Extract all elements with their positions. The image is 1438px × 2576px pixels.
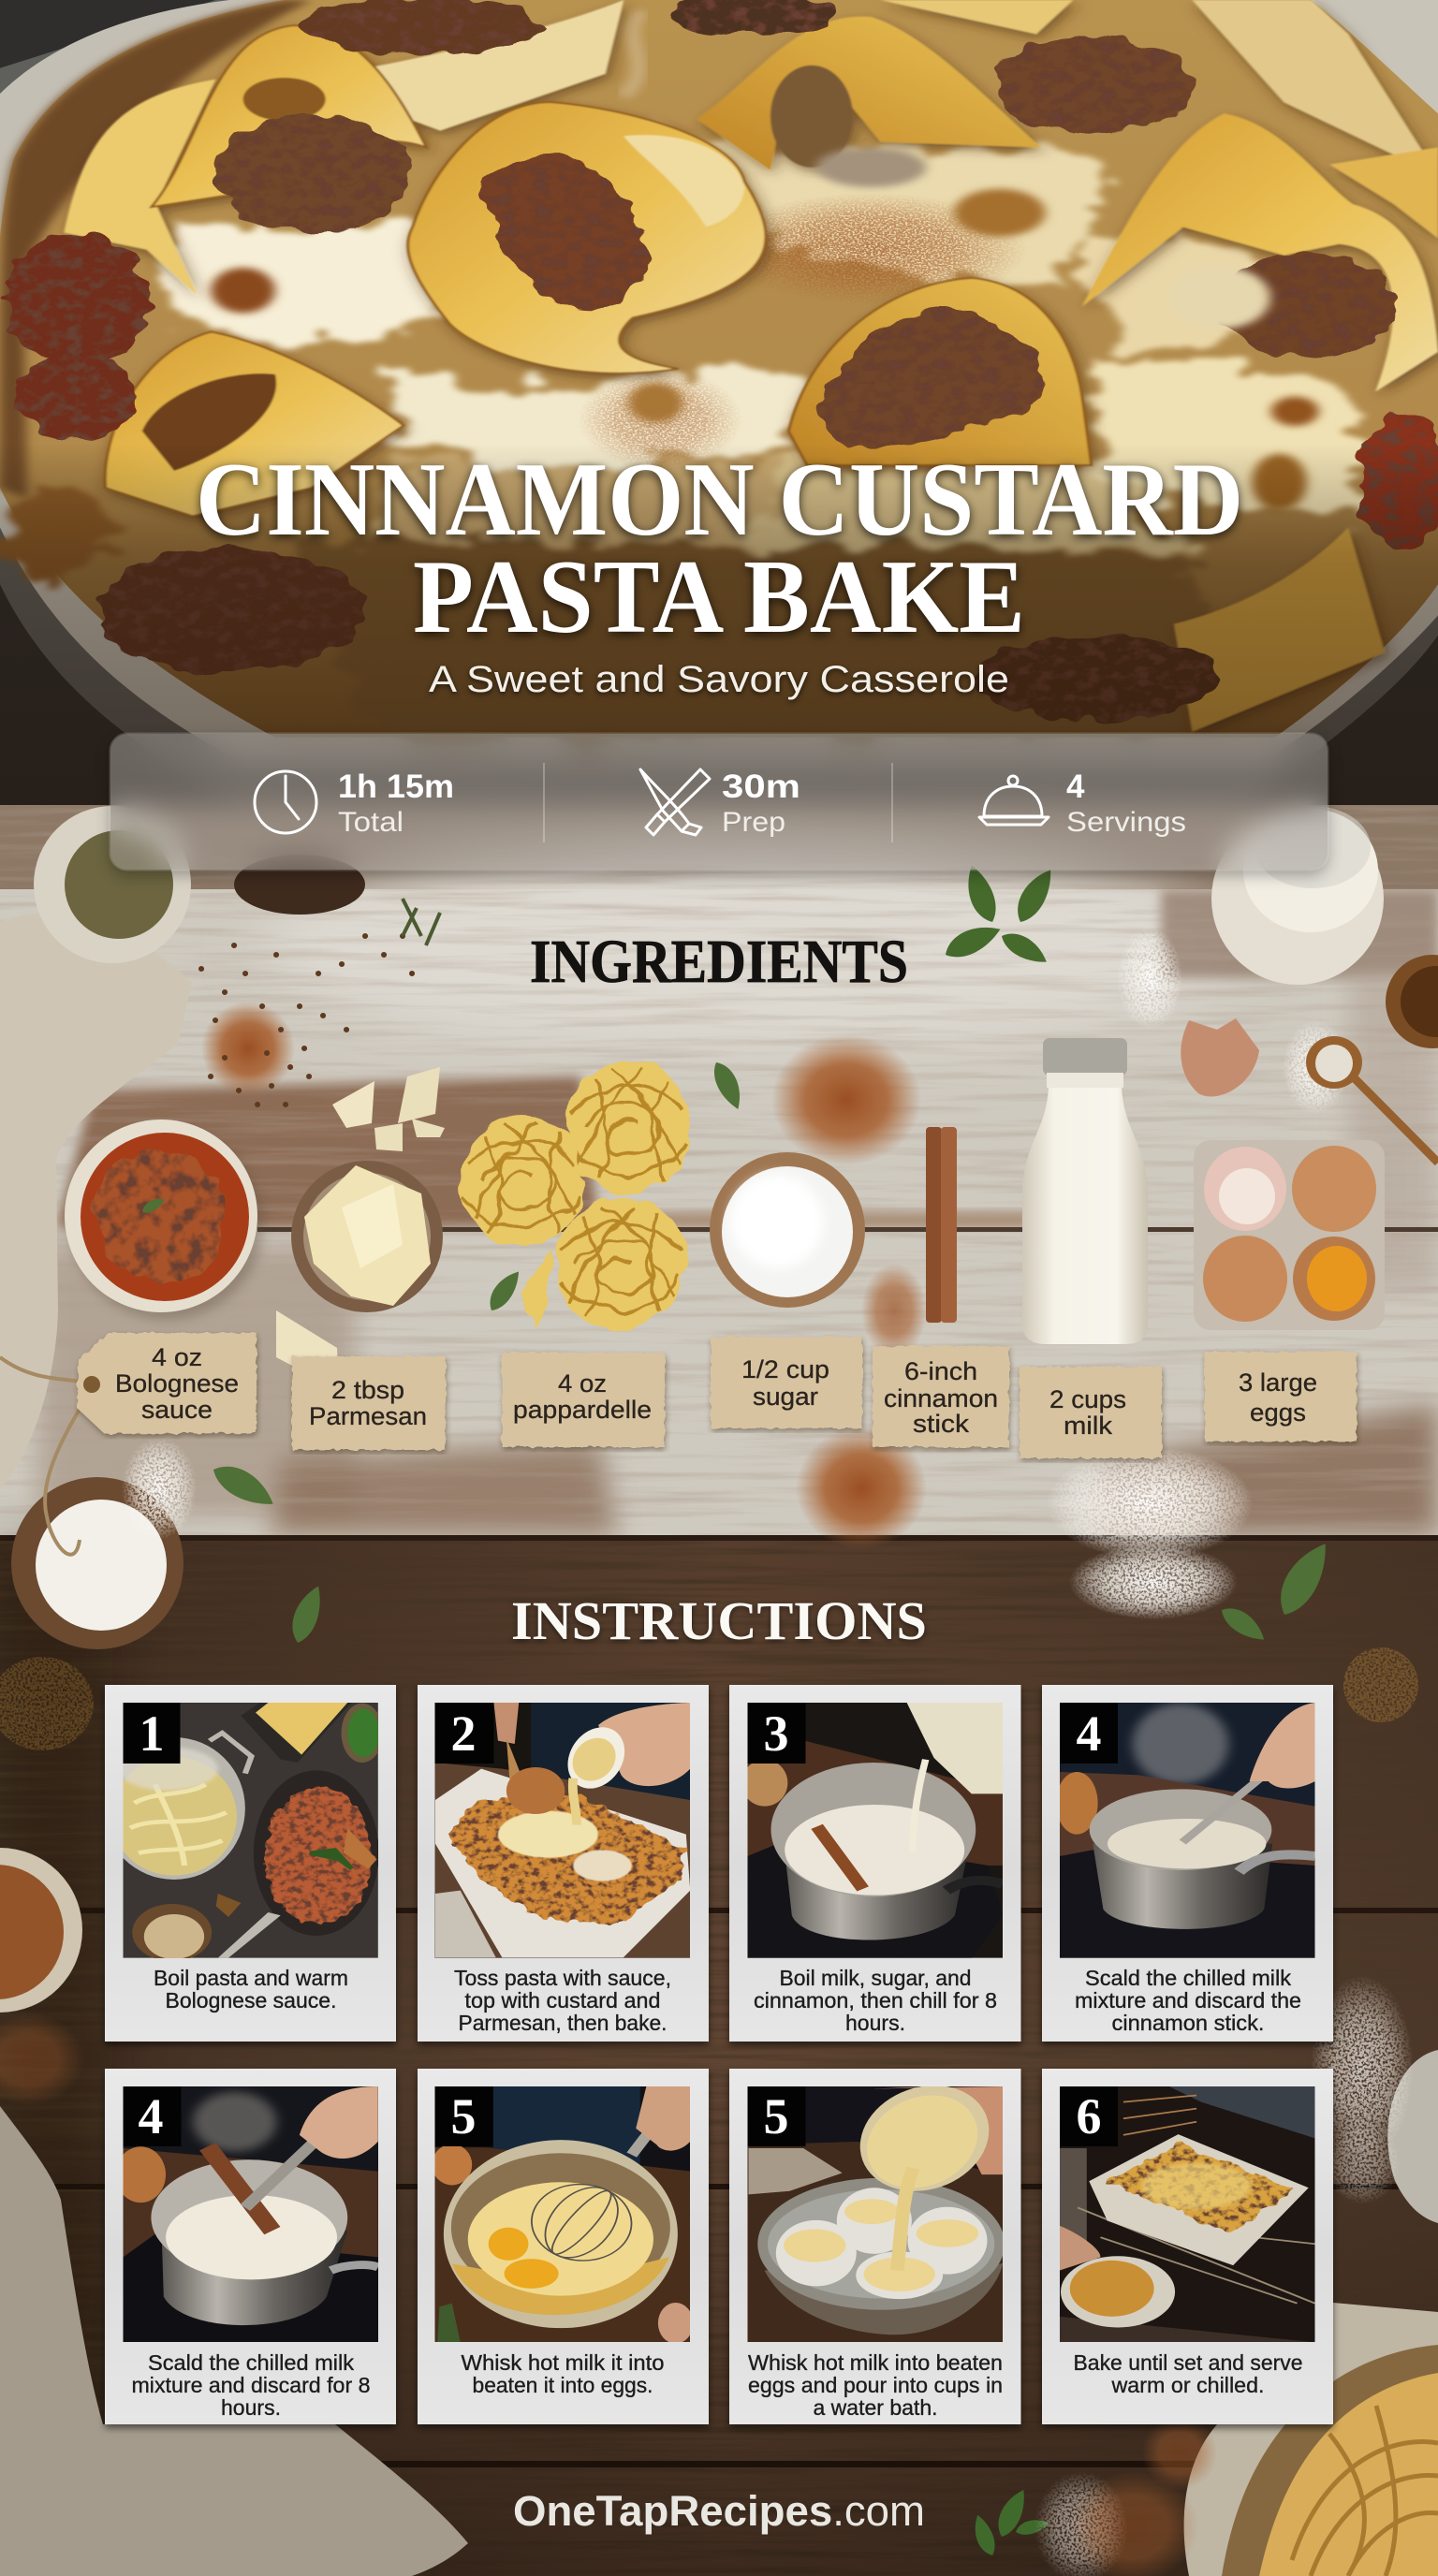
label: Parmesan — [292, 1356, 446, 1450]
label: sugar — [711, 1337, 862, 1428]
ingredient: egg carton — [1194, 1140, 1385, 1330]
label: milk — [1020, 1367, 1162, 1458]
caption: cinnamon stick. — [1112, 2011, 1264, 2035]
stat: servings — [1066, 768, 1186, 838]
icon: dark jar lid — [234, 855, 365, 915]
stat: total time: 1h 15m — [338, 768, 454, 805]
cinnamon and flour dustings — [122, 899, 1348, 1619]
step number: 4 — [1077, 1705, 1101, 1762]
label: Bolognese tag: Bolognese — [115, 1369, 239, 1398]
hero photo: baked pasta casserole — [0, 0, 1438, 817]
stat: total time — [338, 768, 454, 838]
caption: eggs and pour into cups in — [748, 2373, 1003, 2397]
caption — [131, 2350, 371, 2420]
caption: warm or chilled. — [1110, 2373, 1264, 2397]
heading: instructions: INSTRUCTIONS — [511, 1590, 927, 1651]
step card 8 — [1042, 2069, 1333, 2424]
label: pappardelle: pappardelle — [513, 1396, 652, 1424]
caption: Parmesan, then bake. — [459, 2011, 667, 2035]
caption: cinnamon, then chill for 8 — [754, 1988, 997, 2012]
icon: flour jar — [1211, 806, 1384, 985]
label: Bolognese tag: sauce — [141, 1396, 213, 1424]
caption — [154, 1966, 348, 2012]
title: Cinnamon Custard Pasta Bake: CINNAMON CUSTARD — [196, 442, 1243, 558]
step number — [124, 1703, 180, 1764]
icon: herb sprig — [940, 862, 1060, 970]
step number — [124, 2086, 182, 2146]
photo: pouring custard — [747, 2071, 1012, 2343]
stat: prep time: 30m — [722, 768, 800, 805]
caption: Scald the chilled milk — [1085, 1966, 1292, 1990]
icon: linen cloth — [0, 913, 192, 1488]
label: eggs: 3 large — [1239, 1368, 1317, 1397]
photo: oven bake — [1060, 2086, 1316, 2343]
caption: hours. — [845, 2011, 905, 2035]
background: pale rustic wood table — [0, 805, 1438, 1544]
label: Parmesan: Parmesan — [309, 1402, 427, 1430]
photo: tossing pasta — [434, 1703, 691, 1958]
caption: Scald the chilled milk — [148, 2350, 355, 2375]
photo: whisking eggs — [432, 2086, 693, 2344]
step number: 6 — [1077, 2088, 1101, 2144]
step card 6 — [418, 2069, 709, 2424]
caption — [1075, 1966, 1301, 2035]
label: Parmesan: 2 tbsp — [331, 1376, 404, 1404]
icon: spice bowl — [34, 806, 191, 963]
step number: 2 — [451, 1705, 476, 1762]
label: eggs — [1205, 1352, 1357, 1442]
label: Bolognese tag: 4 oz — [152, 1343, 202, 1371]
icon: white pitcher right — [1387, 2050, 1438, 2223]
icon: cinnamon bowl left — [0, 1848, 82, 2012]
label: sugar: 1/2 cup — [741, 1355, 829, 1383]
label: Bolognese tag — [77, 1333, 257, 1434]
props: dark table decorations — [0, 1647, 1438, 2576]
caption — [754, 1966, 997, 2035]
photo: scalding milk — [1056, 1703, 1315, 1958]
photo: removing cinnamon stick — [115, 2086, 379, 2343]
ingredient: cinnamon stick — [926, 1127, 957, 1323]
stat: prep time: Prep — [722, 807, 785, 838]
label: milk: 2 cups — [1049, 1385, 1126, 1413]
icon: twine — [0, 1357, 94, 1555]
icon: clock — [255, 771, 316, 833]
step card 2 — [418, 1685, 709, 2042]
icon: serving cloche — [979, 776, 1049, 825]
icon: linen cloth bottom left — [0, 2106, 468, 2576]
stat: servings: Servings — [1066, 807, 1186, 838]
label: milk: milk — [1064, 1412, 1113, 1440]
caption — [748, 2350, 1003, 2420]
caption — [454, 1966, 671, 2035]
stat: servings: 4 — [1066, 768, 1085, 805]
title: Cinnamon Custard Pasta Bake — [196, 442, 1243, 655]
icon: wooden spoon — [1306, 1036, 1438, 1163]
heading: ingredients: INGREDIENTS — [530, 928, 908, 996]
caption: Boil milk, sugar, and — [779, 1966, 972, 1990]
stat: total time: Total — [338, 807, 404, 838]
step card 4 — [1042, 1685, 1333, 2042]
label: cinnamon stick: 6-inch — [904, 1357, 977, 1385]
step card 3 — [729, 1685, 1020, 2042]
caption: Toss pasta with sauce, — [454, 1966, 671, 1990]
step number — [747, 1703, 805, 1764]
icon: small dish top right — [1386, 955, 1438, 1048]
label: sugar: sugar — [753, 1383, 818, 1411]
caption: a water bath. — [813, 2395, 938, 2420]
step number: 5 — [764, 2088, 788, 2144]
icon: pasta bowl bottom right — [1184, 2303, 1438, 2576]
title: Cinnamon Custard Pasta Bake: PASTA BAKE — [413, 539, 1025, 655]
step number: 5 — [451, 2088, 476, 2144]
stat: prep time — [722, 768, 800, 838]
caption — [1073, 2350, 1303, 2397]
step number — [434, 1703, 494, 1764]
stats bar — [110, 734, 1328, 870]
label: cinnamon stick: cinnamon — [884, 1384, 998, 1412]
caption: beaten it into eggs. — [472, 2373, 653, 2397]
photo: pasta and sauce — [103, 1703, 383, 1961]
caption: Whisk hot milk it into — [461, 2350, 665, 2375]
ingredient: Bolognese sauce bowl — [65, 1120, 263, 1320]
footer: brand: OneTapRecipes.com — [513, 2487, 925, 2535]
background: dark wood table — [0, 1541, 1438, 2576]
label: eggs: eggs — [1250, 1398, 1306, 1427]
step number — [434, 2086, 492, 2146]
label: cinnamon stick: stick — [913, 1410, 970, 1438]
step number: 3 — [764, 1705, 788, 1762]
label: pappardelle — [502, 1353, 665, 1447]
subtitle: A Sweet and Savory Casserole — [429, 659, 1009, 700]
photo: boiling milk — [741, 1703, 1004, 1958]
step number — [1060, 1703, 1118, 1764]
icon: flour bowl — [11, 1477, 183, 1649]
dustings — [0, 1647, 1418, 2576]
ingredient: pappardelle nests — [461, 1060, 690, 1329]
caption — [461, 2350, 665, 2397]
caption: Bolognese sauce. — [165, 1988, 337, 2012]
caption: Boil pasta and warm — [154, 1966, 348, 1990]
caption: hours. — [221, 2395, 281, 2420]
step card 1 — [103, 1685, 396, 2042]
label: pappardelle: 4 oz — [558, 1369, 607, 1398]
step number: 1 — [139, 1705, 165, 1762]
icon: green leaves — [208, 1058, 1338, 1647]
caption: mixture and discard for 8 — [131, 2373, 371, 2397]
label: cinnamon stick — [873, 1346, 1009, 1447]
icon: broken egg shell — [1181, 1018, 1259, 1096]
ingredient: sugar bowl — [710, 1152, 865, 1308]
icon: crossed knife and spatula — [640, 769, 710, 835]
caption: Bake until set and serve — [1073, 2350, 1303, 2375]
ingredient: Parmesan bowl — [276, 1067, 445, 1390]
props: table decorations around ingredients — [0, 806, 1438, 1649]
step number: 4 — [139, 2088, 163, 2144]
ingredient labels — [77, 1333, 1357, 1458]
step number — [1060, 2086, 1118, 2146]
ingredient: milk bottle — [1022, 1038, 1148, 1344]
caption: Whisk hot milk into beaten — [748, 2350, 1003, 2375]
caption: mixture and discard the — [1075, 1988, 1301, 2012]
caption: top with custard and — [464, 1988, 661, 2012]
step card 5 — [105, 2069, 396, 2424]
step number — [747, 2086, 805, 2146]
step card 7 — [729, 2069, 1020, 2424]
icon: basil sprig — [969, 2485, 1050, 2558]
